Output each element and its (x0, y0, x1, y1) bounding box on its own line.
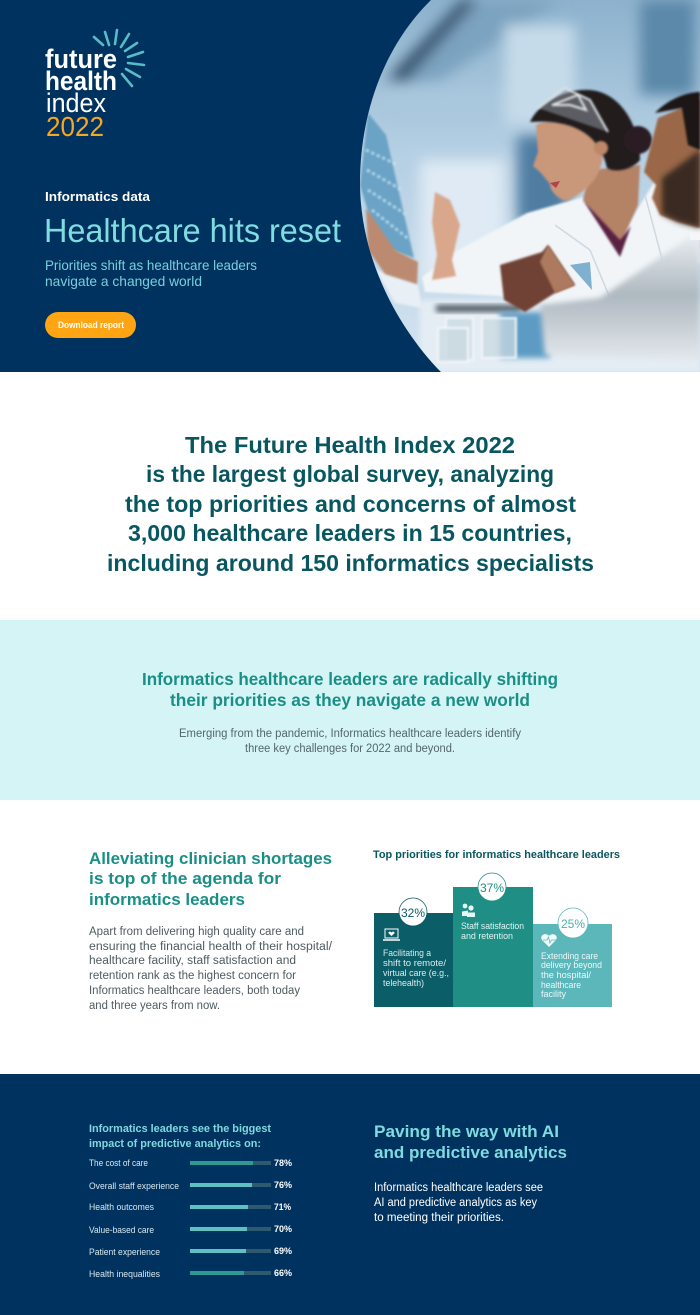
woman's coat (422, 182, 700, 304)
AI heading: and predictive analytics (374, 1143, 567, 1162)
intro statement (107, 432, 594, 576)
row: the cost of care: 78% (274, 1158, 292, 1168)
logo wordmark: future (45, 44, 117, 74)
man's collar (690, 228, 700, 240)
shortages heading: Alleviating clinician shortages (89, 849, 332, 868)
shortages paragraph: Informatics healthcare leaders, both today (89, 985, 300, 997)
bar: 37% staff satisfaction: 37% (480, 881, 504, 895)
hero subtitle (45, 257, 257, 289)
AI paragraph: to meeting their priorities. (374, 1212, 504, 1224)
hero panel (0, 0, 700, 372)
near hand sleeve (376, 270, 422, 308)
AI paragraph (374, 1182, 543, 1224)
bar: 25% care beyond hospital: Extending care (541, 951, 598, 961)
raised hand (432, 192, 460, 280)
bar: 32% remote care: Facilitating a (383, 948, 432, 958)
row: overall staff experience: 76% (274, 1180, 292, 1190)
analytics chart title: impact of predictive analytics on: (89, 1138, 261, 1150)
row: health outcomes (89, 1202, 291, 1212)
bar: 25% care beyond hospital (533, 908, 612, 1007)
download button: Download report (58, 320, 125, 331)
row: the cost of care: The cost of care (89, 1158, 148, 1168)
intro statement: The Future Health Index 2022 (185, 432, 515, 458)
row: overall staff experience (89, 1180, 292, 1191)
logo: future health index 2022 (45, 30, 144, 142)
lab bench and beakers (420, 300, 700, 372)
row: overall staff experience: Overall staff experience (89, 1181, 179, 1191)
navy analytics panel (0, 1074, 700, 1315)
logo wordmark (45, 44, 117, 142)
AI heading: Paving the way with AI (374, 1122, 559, 1141)
icon: laptop heart (383, 929, 400, 940)
bar: 32% remote care (374, 898, 453, 1007)
row: health inequalities: Health inequalities (89, 1269, 160, 1279)
woman's face (533, 121, 603, 201)
logo wordmark: index (46, 88, 106, 118)
woman's hair (530, 90, 640, 170)
neck (583, 165, 640, 245)
shortages paragraph: healthcare facility, staff satisfaction and (89, 955, 296, 967)
AI paragraph: AI and predictive analytics as key (374, 1197, 537, 1209)
logo wordmark: 2022 (46, 111, 104, 142)
AI heading (374, 1122, 567, 1162)
download button (45, 312, 136, 338)
intro statement: is the largest global survey, analyzing (146, 461, 554, 487)
row: health outcomes: Health outcomes (89, 1202, 154, 1212)
band text: three key challenges for 2022 and beyond. (245, 743, 455, 755)
band text (179, 728, 521, 755)
hero subtitle: Priorities shift as healthcare leaders (45, 257, 257, 273)
bar: 25% care beyond hospital: facility (541, 989, 566, 999)
band heading: their priorities as they navigate a new world (170, 690, 530, 710)
icon: heart pulse (541, 934, 557, 947)
row: patient experience (89, 1246, 292, 1257)
analytics chart title (89, 1123, 271, 1150)
hand at monitor (366, 208, 418, 284)
bar: 25% care beyond hospital: delivery beyond (541, 960, 602, 970)
bar: 25% care beyond hospital: healthcare (541, 980, 581, 990)
goggles (538, 88, 608, 132)
analytics chart title: Informatics leaders see the biggest (89, 1123, 271, 1135)
hero photo: scientists at a screen (350, 0, 700, 372)
row: value-based care: Value-based care (89, 1225, 154, 1235)
bar: 32% remote care: virtual care (e.g., (383, 968, 449, 978)
bar: 32% remote care: shift to remote/ (383, 958, 446, 968)
man's sleeve (540, 230, 700, 360)
bar: 25% care beyond hospital: the hospital/ (541, 970, 591, 980)
row: patient experience: 69% (274, 1246, 292, 1256)
chart title: Top priorities for informatics healthcare leaders (373, 849, 620, 861)
logo sun rays (94, 30, 144, 86)
shortages paragraph: Apart from delivering high quality care and (89, 926, 304, 938)
hero title: Healthcare hits reset (44, 212, 341, 249)
bar: 25% care beyond hospital: 25% (561, 917, 585, 931)
row: value-based care: 70% (274, 1224, 292, 1234)
shortages paragraph: retention rank as the highest concern for (89, 970, 296, 982)
bar: 37% staff satisfaction: and retention (461, 931, 513, 941)
intro statement: the top priorities and concerns of almost (125, 491, 576, 517)
band heading (142, 669, 558, 710)
bar: 37% staff satisfaction (453, 873, 533, 1007)
priorities chart (374, 873, 612, 1007)
shortages paragraph: ensuring the financial health of their hospital/ (89, 941, 333, 953)
shortages paragraph (89, 926, 333, 1012)
bar chart: predictive analytics impact (89, 1158, 292, 1279)
bar: 32% remote care: telehealth) (383, 978, 424, 988)
icon: staff (462, 904, 475, 917)
hero eyebrow: Informatics data (45, 189, 151, 204)
band heading: Informatics healthcare leaders are radically shifting (142, 669, 558, 689)
AI paragraph: Informatics healthcare leaders see (374, 1182, 543, 1194)
row: patient experience: Patient experience (89, 1247, 160, 1257)
band text: Emerging from the pandemic, Informatics healthcare leaders identify (179, 728, 521, 740)
row: health outcomes: 71% (274, 1202, 291, 1212)
monitor (360, 113, 414, 258)
scrubs (583, 200, 631, 257)
shortages heading: informatics leaders (89, 890, 245, 909)
light teal band (0, 620, 700, 800)
man's fist (500, 245, 575, 312)
row: health inequalities (89, 1268, 292, 1279)
hero subtitle: navigate a changed world (45, 273, 202, 289)
intro statement: including around 150 informatics specialists (107, 550, 594, 576)
row: the cost of care (89, 1158, 292, 1168)
logo wordmark: health (45, 66, 117, 96)
bar: 32% remote care: 32% (401, 906, 425, 920)
shortages heading (89, 849, 332, 909)
shortages heading: is top of the agenda for (89, 869, 281, 888)
man's face (644, 100, 700, 228)
row: health inequalities: 66% (274, 1268, 292, 1278)
row: value-based care (89, 1224, 292, 1235)
shortages paragraph: and three years from now. (89, 1000, 220, 1012)
bar: 37% staff satisfaction: Staff satisfaction (461, 921, 524, 931)
intro statement: 3,000 healthcare leaders in 15 countries, (128, 520, 572, 546)
